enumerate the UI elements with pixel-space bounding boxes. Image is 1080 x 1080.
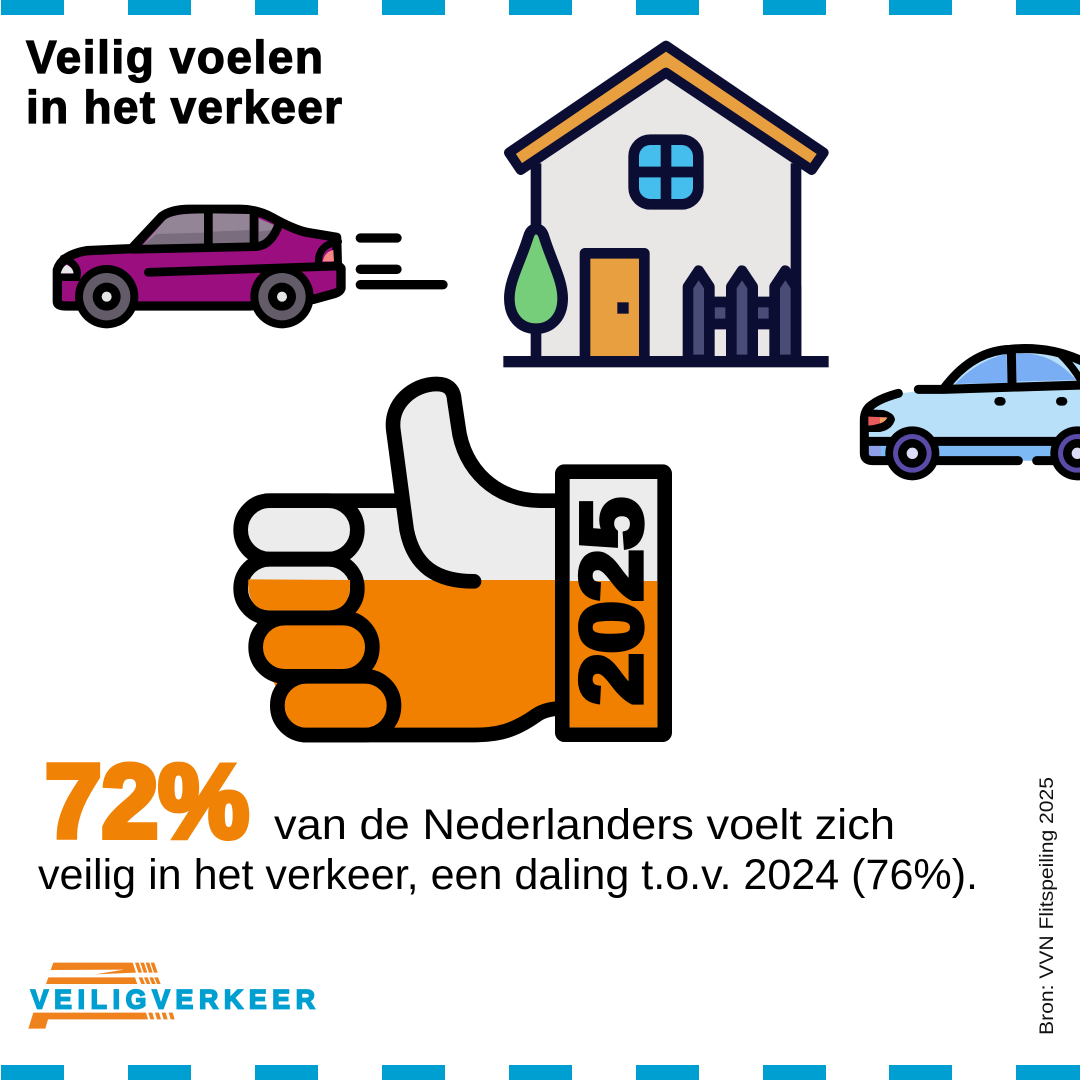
- door: [585, 253, 644, 362]
- window: [634, 140, 698, 204]
- fingers: [241, 501, 394, 735]
- car wheels: [75, 265, 138, 328]
- car window lines: [133, 210, 279, 249]
- logo orange bars: [28, 963, 175, 1029]
- statement text: van de Nederlanders voelt zich: [274, 801, 895, 849]
- top stripe border: [1, 0, 1080, 15]
- car windows: [143, 213, 274, 245]
- headlight: [867, 409, 895, 432]
- speed lines: [360, 238, 443, 285]
- car lights: [61, 265, 74, 273]
- bottom stripe border: [1, 1065, 1080, 1080]
- roof: [509, 46, 824, 170]
- car side line: [148, 266, 338, 272]
- logo wordmark: VEILIGVERKEER: [31, 984, 315, 1014]
- hand outline: [267, 384, 563, 735]
- fence: [688, 271, 796, 360]
- icon: purple car with speed lines: [57, 209, 443, 328]
- source note: Bron: VVN Flitspeiling 2025: [1036, 777, 1058, 1035]
- cuff year label: 2025: [564, 498, 660, 705]
- cuff: [562, 472, 665, 735]
- tree: [509, 229, 563, 329]
- big percentage: 72%: [45, 744, 249, 860]
- house wall: [536, 73, 796, 362]
- statement text: [38, 801, 978, 899]
- wheels: [885, 426, 939, 480]
- car windows: [955, 354, 1076, 384]
- title: Veilig voelen: [26, 31, 323, 83]
- icon: light blue car: [864, 348, 1080, 480]
- ground: [503, 356, 829, 367]
- car body: [57, 209, 341, 306]
- icon: house: [503, 46, 829, 367]
- door handles: [994, 397, 1067, 406]
- icon: thumbs up filled to 72 percent: [241, 384, 665, 735]
- logo: Veilig Verkeer: [28, 963, 315, 1029]
- hand fill: [267, 384, 563, 735]
- car outline: [918, 349, 1080, 389]
- car body: [865, 348, 1080, 461]
- statement text: veilig in het verkeer, een daling t.o.v. 2024 (76%).: [38, 851, 978, 899]
- title: in het verkeer: [26, 81, 342, 133]
- title: [26, 31, 342, 133]
